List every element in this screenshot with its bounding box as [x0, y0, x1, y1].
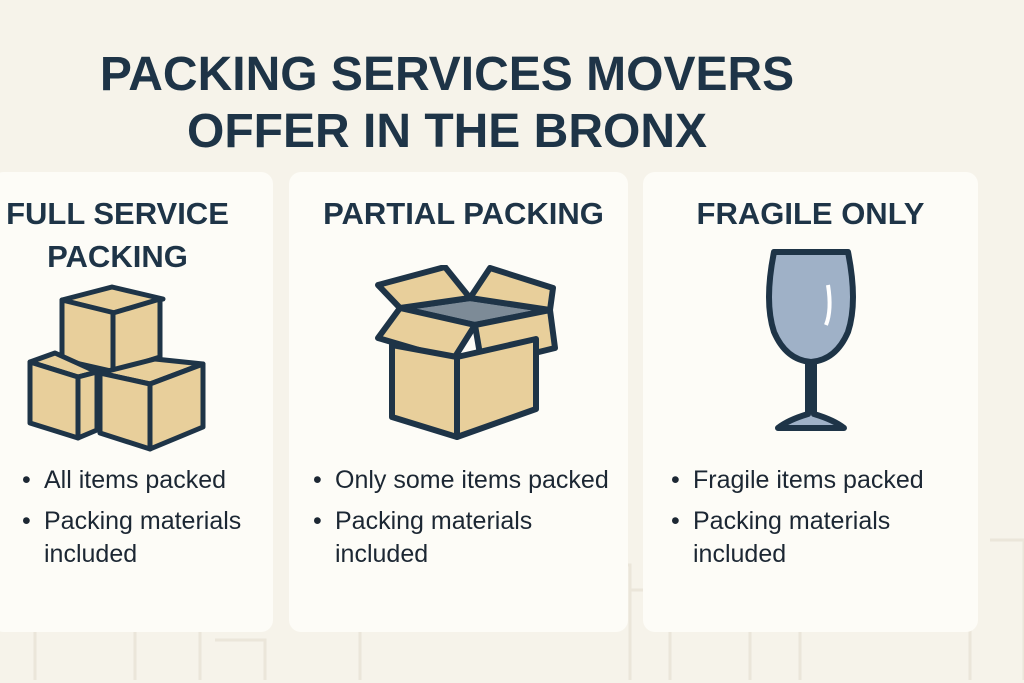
bullets [314, 466, 609, 568]
panel: fragile only [643, 172, 978, 632]
bullets: Packing materials [335, 507, 532, 535]
bullets: included [335, 540, 428, 568]
heading [6, 196, 229, 274]
bullets: Fragile items packed [693, 466, 924, 494]
bullets: Packing materials [44, 507, 241, 535]
bullets: included [693, 540, 786, 568]
skyline background [34, 538, 1024, 680]
icon: open box [375, 265, 558, 440]
bullets [23, 466, 241, 568]
heading: PARTIAL PACKING [323, 196, 604, 231]
panel: full service [0, 172, 273, 632]
heading: FULL SERVICE [6, 196, 229, 231]
bullets [672, 466, 924, 568]
bullets: All items packed [44, 466, 226, 494]
heading: PACKING [47, 239, 188, 274]
title: OFFER IN THE BRONX [187, 105, 707, 158]
panel: partial packing [289, 172, 628, 632]
title: PACKING SERVICES MOVERS [100, 48, 794, 101]
title [100, 48, 794, 158]
heading: FRAGILE ONLY [697, 196, 924, 231]
bullets: Only some items packed [335, 466, 609, 494]
icon: stacked boxes [28, 284, 206, 452]
icon: wine glass [766, 249, 856, 431]
bullets: included [44, 540, 137, 568]
bullets: Packing materials [693, 507, 890, 535]
